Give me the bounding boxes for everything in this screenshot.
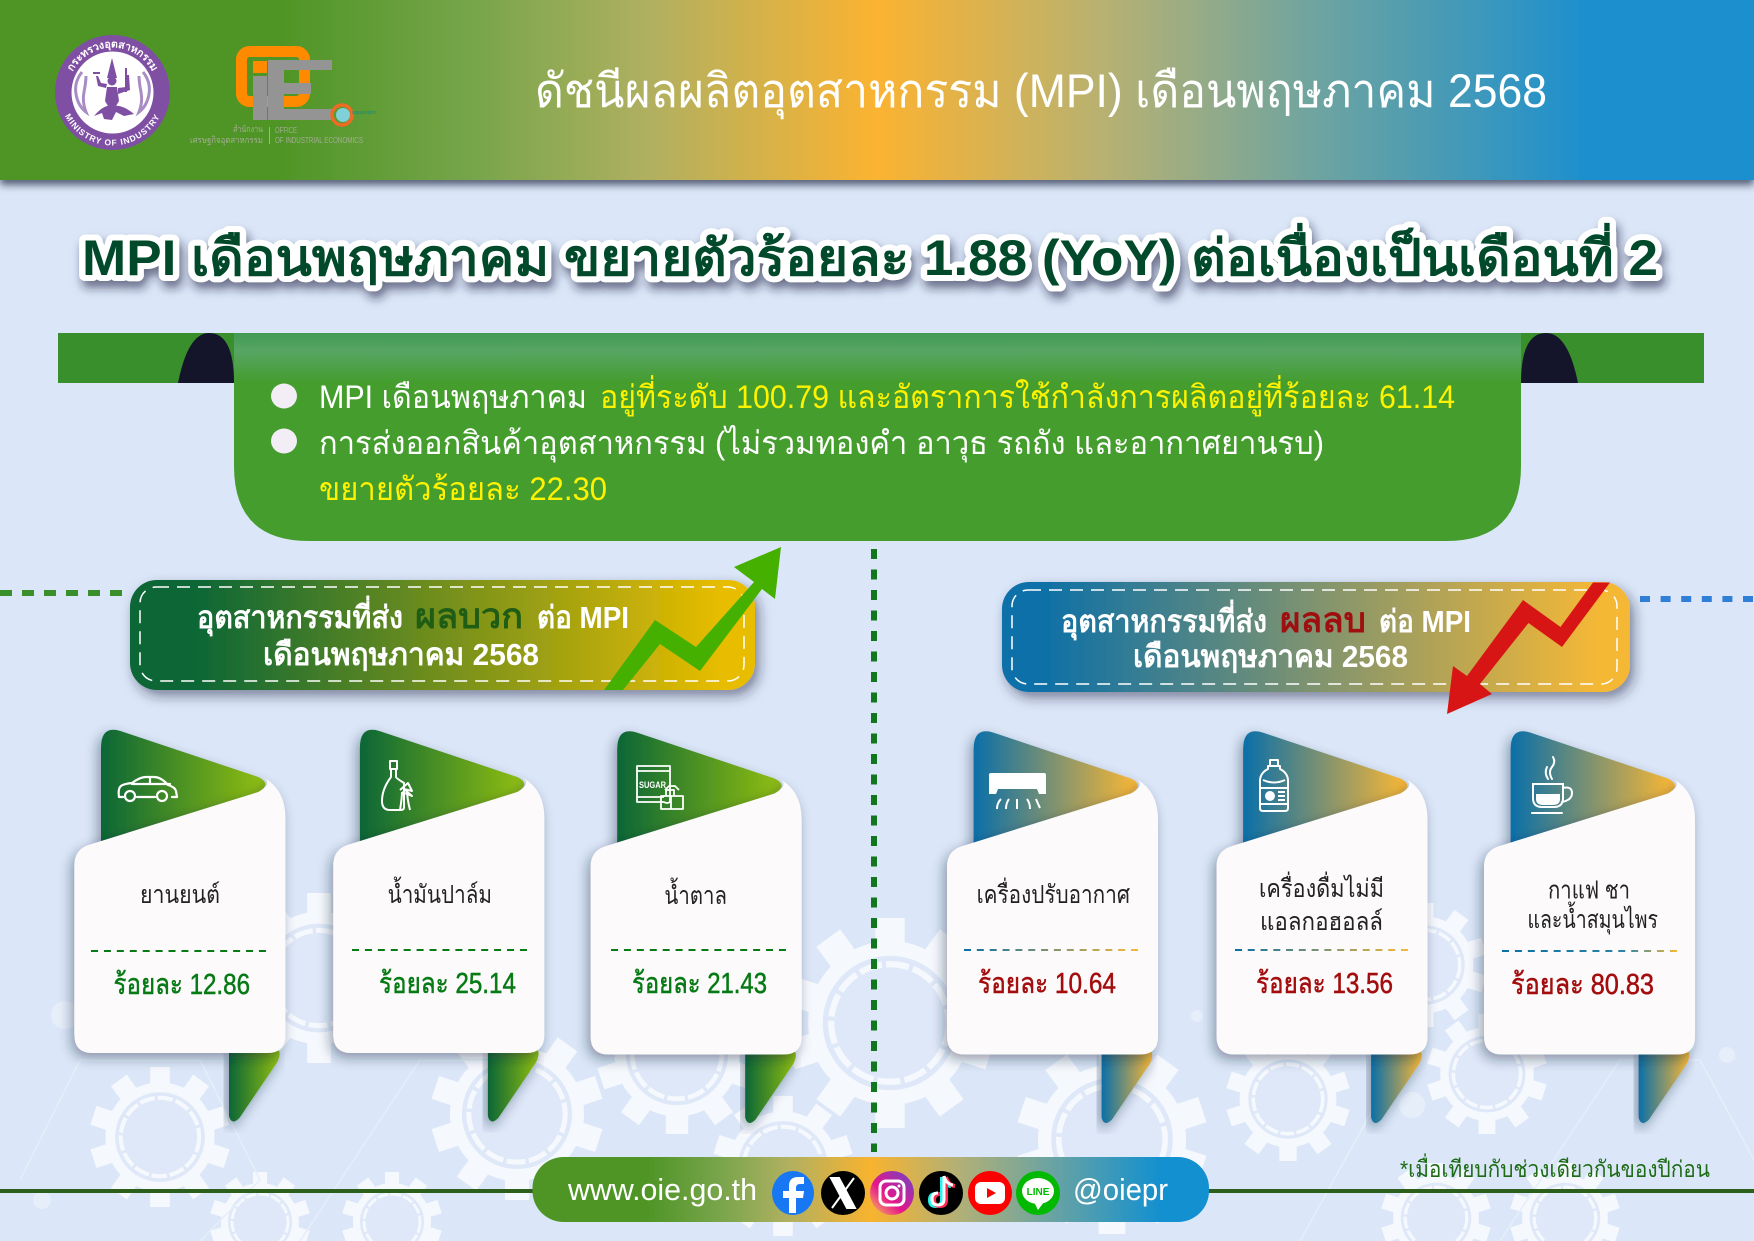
icon: sugar: SUGAR <box>639 780 666 790</box>
header title: ดัชนีผลผลิตอุตสาหกรรม (MPI) เดือนพฤษภาคม 2568 <box>535 64 1547 120</box>
logo: Office of Industrial Economics: เศรษฐกิจอุตสาหกรรม <box>190 135 263 146</box>
right connector <box>1640 596 1754 602</box>
panel: summary ribbon <box>58 333 1704 541</box>
banner: negative industries <box>1002 582 1630 714</box>
icon: facebook <box>772 1171 814 1215</box>
banner: positive industries: เดือนพฤษภาคม 2568 <box>263 637 539 672</box>
logo: Office of Industrial Economics: OFFICE <box>275 126 297 135</box>
footer rule <box>0 1189 1754 1193</box>
main headline: MPI เดือนพฤษภาคม ขยายตัวร้อยละ 1.88 (YoY) ต่อเนื่องเป็นเดือนที่ 2 <box>82 223 1658 286</box>
logo: Ministry of Industry seal: MINISTRY OF INDUSTRY <box>65 113 158 146</box>
banner: positive industries: ต่อ MPI <box>537 600 629 635</box>
card: coffee, tea and herbal drinks: กาแฟ ชา <box>1548 876 1630 904</box>
ribbon band <box>58 333 1704 383</box>
card: coffee, tea and herbal drinks: ร้อยละ 80.83 <box>1511 969 1654 1001</box>
logo: Ministry of Industry seal: กระทรวงอุตสาหกรรม <box>68 41 158 72</box>
card: coffee, tea and herbal drinks: และน้ำสมุนไพร <box>1527 901 1658 935</box>
icon: water bottle <box>1260 760 1288 811</box>
card: automotive: ร้อยละ 12.86 <box>114 969 250 1001</box>
logo: Office of Industrial Economics: OF INDUSTRIAL ECONOMICS <box>275 136 363 145</box>
card: sugar: น้ำตาล <box>664 877 727 910</box>
ribbon folds <box>178 333 234 383</box>
card: non-alcoholic beverages: ร้อยละ 13.56 <box>1256 968 1393 1000</box>
social handle: @oiepr <box>1073 1172 1168 1207</box>
summary panel <box>234 333 1521 541</box>
arrow: up <box>604 547 781 690</box>
center divider <box>871 549 877 1152</box>
bullet 2: ขยายตัวร้อยละ 22.30 <box>319 471 607 507</box>
logo: Office of Industrial Economics: สำนักงาน <box>233 124 263 134</box>
website: www.oie.go.th <box>567 1172 757 1207</box>
icon: air conditioner <box>989 773 1046 809</box>
logo: Office of Industrial Economics: organization <box>352 110 376 116</box>
card: automotive: ยานยนต์ <box>140 881 220 909</box>
card: non-alcoholic beverages: แอลกอฮอลล์ <box>1260 908 1383 936</box>
footnote: *เมื่อเทียบกับช่วงเดียวกันของปีก่อน <box>1400 1153 1710 1182</box>
card: air conditioner <box>947 731 1158 1123</box>
bullet 1 <box>271 375 1455 417</box>
bullet 2 <box>271 425 1324 507</box>
bullet 1: MPI เดือนพฤษภาคม <box>319 379 587 415</box>
card: non-alcoholic beverages <box>1216 731 1428 1123</box>
card: coffee, tea and herbal drinks <box>1484 731 1695 1123</box>
icon: coffee cup <box>1532 757 1572 813</box>
icon: palm oil bottle <box>382 761 412 810</box>
card: palm oil <box>333 730 544 1122</box>
banner: positive industries: ผลบวก <box>415 597 523 636</box>
icon: line: LINE <box>1027 1187 1050 1198</box>
bullet 2: การส่งออกสินค้าอุตสาหกรรม (ไม่รวมทองคำ อาวุธ รถถัง และอากาศยานรบ) <box>319 425 1324 463</box>
logo: Office of Industrial Economics <box>190 52 376 146</box>
card: palm oil: น้ำมันปาล์ม <box>388 876 492 909</box>
logo: Ministry of Industry seal <box>55 35 170 150</box>
banner: negative industries: อุตสาหกรรมที่ส่ง <box>1061 599 1267 641</box>
card: non-alcoholic beverages: เครื่องดื่มไม่มี <box>1259 871 1384 903</box>
banner: negative industries: ต่อ MPI <box>1379 604 1471 639</box>
left connector <box>0 590 132 596</box>
header background <box>0 0 1754 180</box>
icon: youtube <box>968 1171 1012 1215</box>
card: palm oil: ร้อยละ 25.14 <box>379 968 516 1000</box>
banner: positive industries: อุตสาหกรรมที่ส่ง <box>197 595 403 637</box>
card: sugar <box>591 731 802 1123</box>
icon: X <box>821 1171 865 1215</box>
icon: car <box>119 777 177 801</box>
icon: tiktok <box>919 1171 963 1215</box>
banner: negative industries: เดือนพฤษภาคม 2568 <box>1133 639 1408 674</box>
banner: negative industries: ผลลบ <box>1280 601 1366 640</box>
card: air conditioner: เครื่องปรับอากาศ <box>977 877 1130 909</box>
icon: sugar <box>637 766 683 809</box>
card: automotive <box>74 730 285 1122</box>
footer bar <box>532 1157 1209 1222</box>
bullet 1: อยู่ที่ระดับ 100.79 และอัตราการใช้กำลังการผลิตอยู่ที่ร้อยละ 61.14 <box>600 375 1455 417</box>
banner: positive industries <box>130 547 781 690</box>
arrow: down <box>1447 582 1610 714</box>
header band <box>0 0 1754 191</box>
card: air conditioner: ร้อยละ 10.64 <box>978 968 1116 1000</box>
card: sugar: ร้อยละ 21.43 <box>632 968 767 1000</box>
icon: line <box>1016 1171 1060 1215</box>
decorative gears <box>20 893 1754 1241</box>
icon: instagram <box>870 1171 914 1215</box>
